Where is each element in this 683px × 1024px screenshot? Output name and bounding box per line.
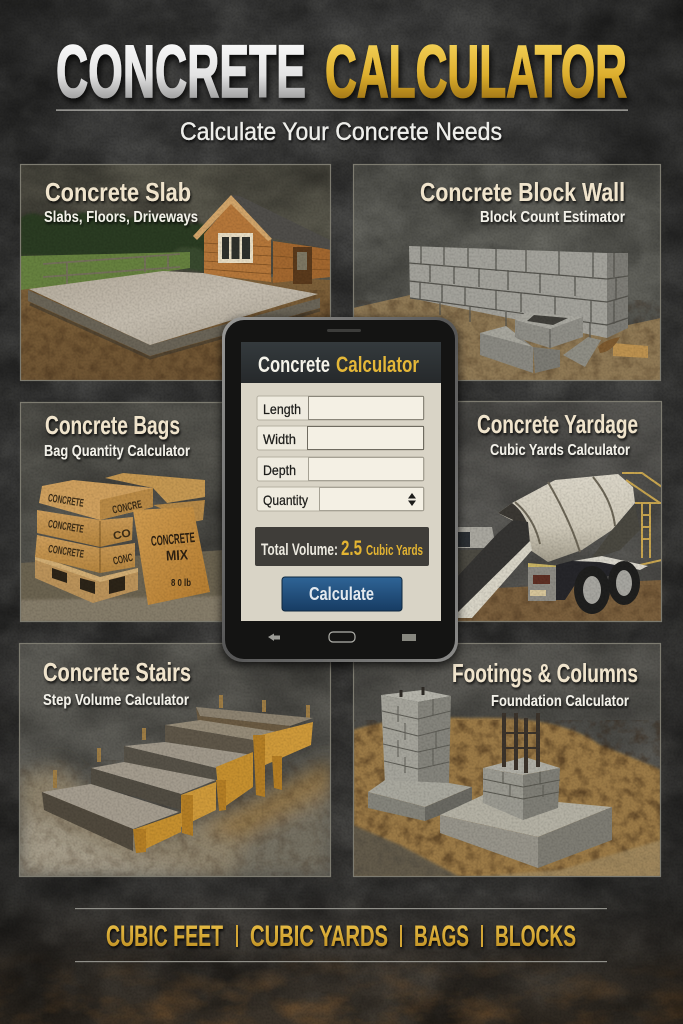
total volume bar: Cubic Yards: [366, 542, 423, 559]
panel: concrete yardage: [456, 402, 662, 622]
field: quantity: [257, 487, 424, 511]
heading: concrete slab: Slabs, Floors, Driveways: [44, 209, 198, 226]
subtitle: Calculate Your Concrete Needs: [180, 118, 502, 146]
heading: concrete yardage: Cubic Yards Calculator: [490, 442, 630, 459]
field: quantity: Quantity: [263, 492, 308, 508]
panel frame: bags: [20, 402, 224, 622]
standing bag: CONCRETE: [150, 529, 196, 549]
footer units: BLOCKS: [495, 920, 576, 953]
heading: concrete stairs: [43, 657, 191, 709]
total volume bar: [255, 527, 429, 566]
heading: concrete bags: [44, 410, 190, 460]
ground: [353, 295, 661, 381]
bag stack: CO: [112, 527, 133, 543]
pavement patch: [353, 825, 460, 877]
bag stack: CONC: [112, 552, 134, 568]
footer units: CUBIC FEET: [106, 920, 223, 953]
calculate button: [282, 577, 402, 611]
standing bag: 8 0 lb: [171, 578, 191, 589]
phone body: [222, 317, 458, 662]
screen title: Calculator: [336, 352, 419, 377]
heading: footings and columns: Foundation Calculator: [491, 693, 629, 710]
screen header: [241, 342, 441, 383]
panel frame: footings: [354, 644, 660, 876]
block column: [368, 687, 472, 821]
total volume bar: 2.5: [341, 537, 362, 560]
calculate button: Calculate: [309, 584, 374, 604]
heading: concrete stairs: Step Volume Calculator: [43, 692, 189, 709]
back bags: [105, 473, 205, 522]
title rule: [56, 110, 628, 111]
soil: [20, 272, 331, 381]
fence: [43, 254, 180, 285]
bag stack: CONCRETE: [47, 518, 85, 536]
heading: block wall: Block Count Estimator: [480, 209, 625, 226]
panel frame: yardage: [458, 402, 662, 622]
stacked blocks: [480, 312, 601, 373]
field: width: [257, 426, 424, 450]
footer rule bottom: [75, 961, 607, 962]
grass: [21, 252, 190, 290]
title: CONCRETE: [56, 30, 306, 113]
speaker: [327, 329, 361, 332]
panel: concrete bags: [20, 402, 225, 622]
footing with rebar pier: [440, 713, 612, 868]
mixer drum: [498, 474, 635, 562]
heading: concrete yardage: [477, 409, 638, 459]
standing bag: [133, 507, 210, 605]
stairs: [42, 707, 313, 851]
bag stack: [35, 480, 153, 573]
stakes: [55, 695, 308, 788]
ground: [19, 760, 331, 877]
heading: concrete slab: Concrete Slab: [45, 177, 191, 207]
truck: [528, 556, 648, 614]
heading: concrete stairs: Concrete Stairs: [43, 657, 191, 687]
screen title: [258, 352, 419, 377]
cab: [458, 527, 496, 548]
soil mound: [353, 718, 661, 877]
footer rule top: [75, 908, 607, 909]
nav icon: back: [268, 634, 280, 641]
heading: concrete bags: Bag Quantity Calculator: [44, 443, 190, 460]
field: length: [257, 396, 424, 420]
panel frame: block wall: [354, 164, 660, 380]
panel: concrete block wall: [353, 164, 661, 381]
panel: footings and columns: [353, 643, 661, 877]
field: length: Length: [263, 401, 301, 417]
heading: footings and columns: [452, 658, 638, 710]
chute with wet concrete: [456, 520, 532, 618]
pallet: [35, 555, 138, 603]
phone calculator: [222, 317, 458, 662]
house: [193, 195, 331, 284]
footer units: [106, 920, 576, 953]
total volume bar: Total Volume:: [261, 540, 338, 559]
tools: [613, 343, 648, 358]
field: depth: Depth: [263, 462, 296, 478]
wooden forms: [133, 722, 313, 853]
field: width: Width: [263, 431, 296, 447]
panel: concrete slab: [20, 164, 331, 381]
slab: [28, 271, 320, 358]
footer units: CUBIC YARDS: [250, 920, 388, 953]
heading: concrete bags: Concrete Bags: [45, 410, 180, 440]
nav icon: home: [329, 632, 355, 642]
bag stack: CONCRE: [111, 499, 143, 517]
standing bag: MIX: [166, 546, 189, 564]
panel: concrete stairs: [19, 643, 331, 877]
bag stack: CONCRETE: [47, 543, 85, 561]
footer units: BAGS: [414, 920, 469, 953]
bag stack: CONCRETE: [47, 492, 85, 510]
heading: concrete slab: [44, 177, 198, 226]
trees: [20, 211, 210, 272]
screen: [241, 342, 441, 621]
ground: [456, 580, 662, 622]
wheels: [574, 566, 610, 614]
rear frame and ladder: [622, 473, 662, 565]
heading: block wall: [420, 177, 625, 226]
nav icon: menu: [402, 634, 416, 641]
heading: block wall: Concrete Block Wall: [420, 177, 625, 207]
panel frame: stairs: [20, 644, 330, 876]
screen title: Concrete: [258, 352, 330, 377]
panel frame: slab: [20, 164, 330, 380]
block wall: [409, 246, 628, 340]
field: depth: [257, 457, 424, 481]
